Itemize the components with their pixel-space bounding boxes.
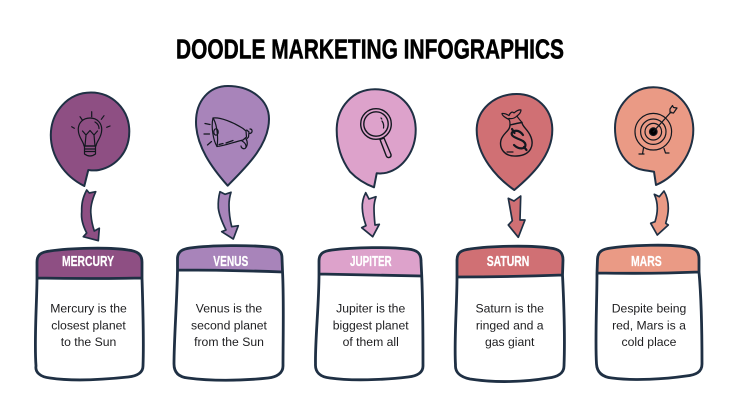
text: Mercury: Mercury is the (50, 302, 127, 316)
text: Saturn: ringed and a (476, 318, 544, 332)
header: Saturn (457, 246, 563, 277)
text: Mercury: to the Sun (61, 335, 116, 349)
arrow: Mars (651, 191, 668, 235)
text: Venus: Venus is the (196, 302, 262, 316)
card: Saturn (455, 246, 564, 382)
card: Venus (174, 246, 283, 380)
column: Mercury (35, 92, 143, 380)
header: Mars (597, 245, 699, 273)
arrow: Jupiter (362, 193, 379, 237)
icon: magnifying glass (361, 109, 391, 158)
column: Venus (174, 86, 283, 380)
text: Mars: Despite being (612, 302, 686, 316)
column: Jupiter (315, 89, 423, 380)
icon: money bag (501, 110, 532, 156)
text: Jupiter: biggest planet (333, 318, 409, 332)
text: Mars: red, Mars is a (612, 318, 686, 332)
pin: Venus (196, 86, 269, 186)
card: Mercury (35, 248, 143, 380)
label: Venus: VENUS (213, 254, 249, 270)
icon: light bulb (72, 112, 110, 156)
label: Saturn: SATURN (487, 254, 529, 270)
pin: Saturn (477, 94, 552, 190)
text: Venus: from the Sun (194, 335, 264, 349)
column: Saturn (455, 94, 564, 382)
column: Mars (596, 87, 702, 379)
card: Jupiter (315, 248, 423, 380)
text: Mars: cold place (622, 335, 677, 349)
text: Jupiter: of them all (343, 335, 399, 349)
pin: Mars (615, 87, 693, 185)
arrow: Mercury (82, 190, 99, 241)
icon: target with arrow (635, 106, 677, 154)
arrow: Saturn (508, 196, 525, 237)
pin: Jupiter (337, 89, 416, 187)
header: Mercury (37, 248, 142, 278)
text: Mercury: closest planet (51, 318, 126, 332)
icon: megaphone (204, 118, 252, 149)
text: Venus: second planet (191, 318, 268, 332)
arrow: Venus (218, 192, 238, 239)
text: Saturn: gas giant (485, 335, 535, 349)
label: Jupiter: JUPITER (350, 254, 392, 270)
label: Mercury: MERCURY (62, 254, 114, 270)
header: Venus (178, 246, 282, 272)
card: Mars (596, 245, 702, 379)
title: DOODLE MARKETING INFOGRAPHICS (176, 34, 564, 64)
text: Jupiter: Jupiter is the (336, 302, 405, 316)
header: Jupiter (319, 248, 422, 276)
pin: Mercury (51, 92, 129, 186)
text: Saturn: Saturn is the (475, 302, 544, 316)
label: Mars: MARS (631, 254, 662, 270)
